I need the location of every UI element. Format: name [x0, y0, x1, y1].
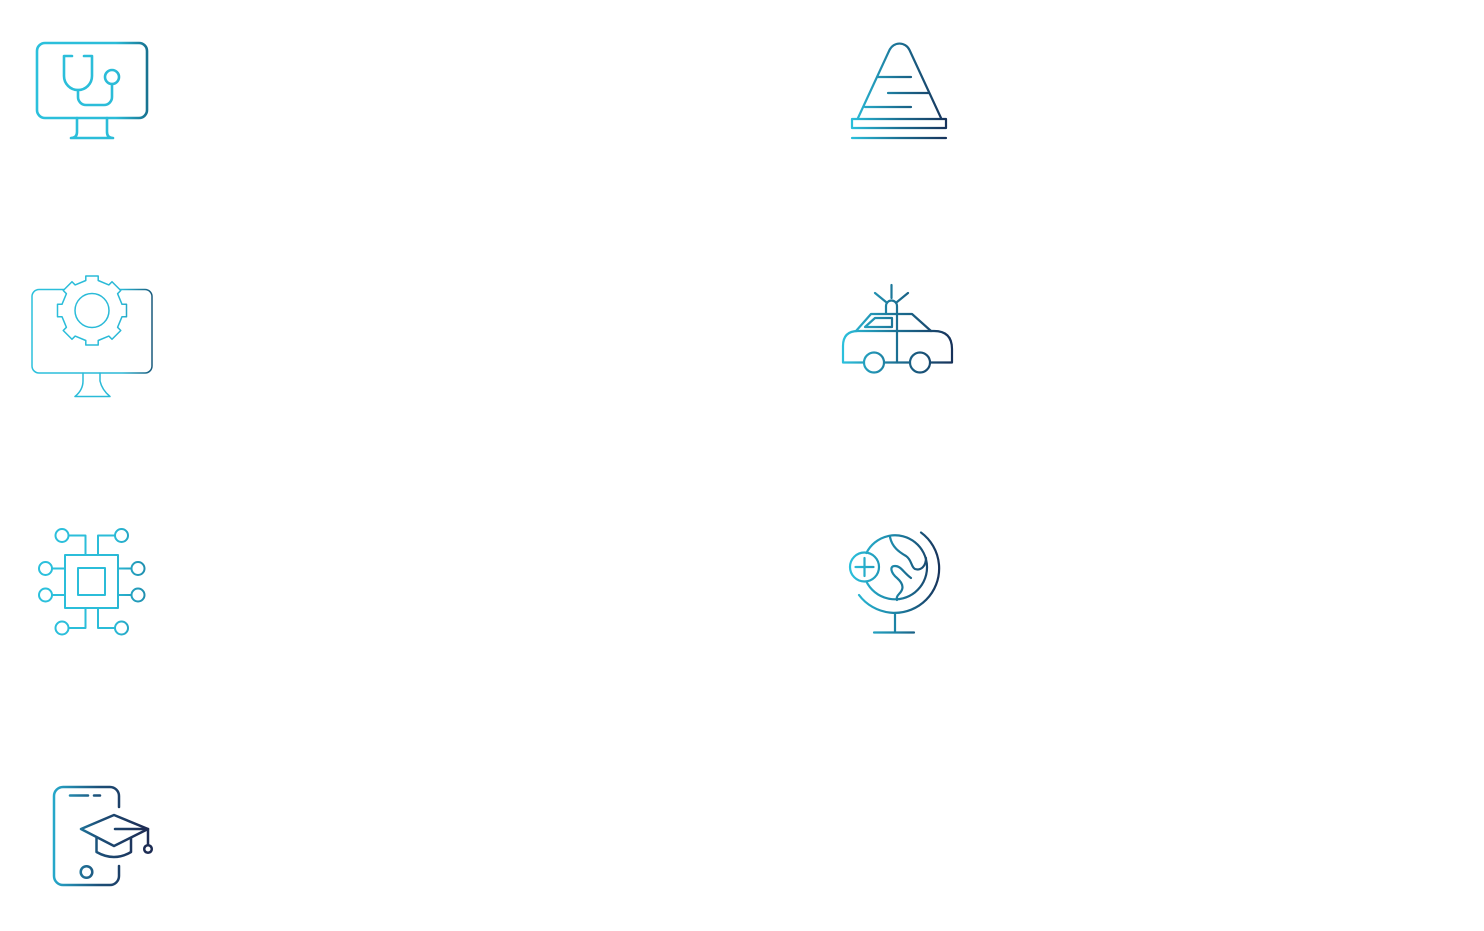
icon: globe with plus [850, 532, 939, 632]
icon: phone with graduation cap [54, 787, 152, 885]
icon: traffic cone [852, 44, 946, 138]
icon: circuit chip [39, 529, 144, 634]
icon: monitor with stethoscope [37, 43, 147, 138]
icon: police car with siren [843, 285, 952, 372]
icon: monitor with gear [32, 276, 152, 396]
